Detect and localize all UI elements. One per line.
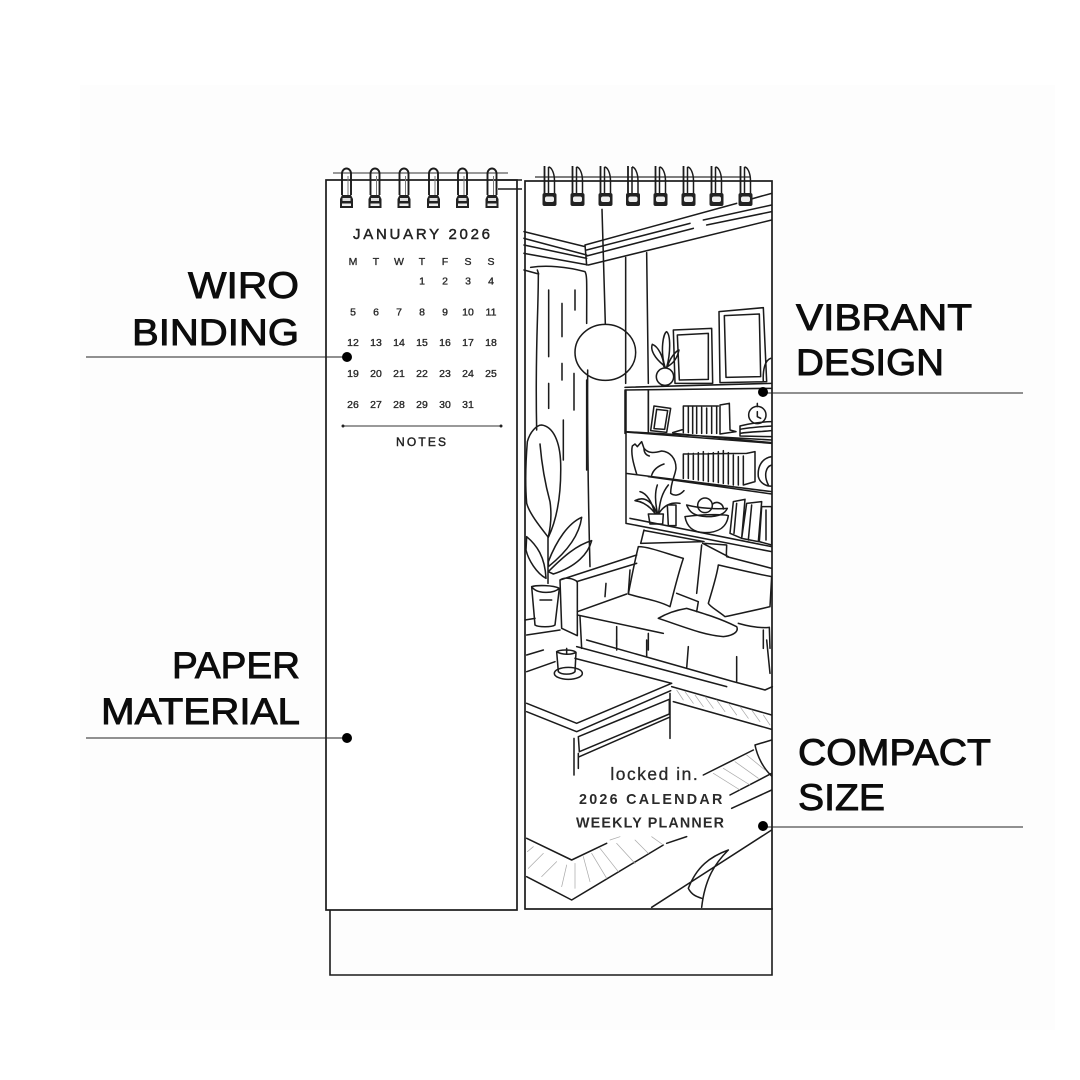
calendar date grid: 19 — [347, 368, 359, 380]
cover title text — [576, 764, 725, 832]
calendar date grid: 15 — [416, 337, 428, 349]
calendar date grid: 10 — [462, 306, 474, 318]
cover title text: locked in. — [610, 764, 698, 784]
calendar date grid: 20 — [370, 368, 382, 380]
callout: wiro binding: WIRO — [188, 265, 299, 306]
calendar date grid: 9 — [442, 306, 448, 318]
calendar date grid: 12 — [347, 337, 359, 349]
calendar date grid: M — [349, 256, 357, 268]
notes heading: NOTES — [396, 435, 446, 449]
calendar date grid: 28 — [393, 399, 405, 411]
calendar date grid: W — [394, 256, 404, 268]
calendar date grid: 7 — [396, 306, 402, 318]
calendar date grid: 27 — [370, 399, 382, 411]
calendar date grid: 25 — [485, 368, 497, 380]
calendar date grid: 1 — [419, 276, 425, 288]
calendar date grid: 11 — [486, 306, 497, 318]
callout: vibrant design: VIBRANT — [796, 297, 972, 338]
illustration: shelves, books, cat, plants, sofa — [525, 370, 772, 650]
calendar date grid — [347, 256, 497, 411]
calendar date grid: 24 — [462, 368, 474, 380]
panel: right cover page with line art — [524, 181, 772, 909]
callout: vibrant design: DESIGN — [796, 342, 944, 383]
calendar date grid: 23 — [439, 368, 451, 380]
calendar date grid: 30 — [439, 399, 451, 411]
callout: paper material: PAPER — [172, 645, 300, 686]
calendar date grid: 29 — [416, 399, 428, 411]
calendar date grid: T — [373, 256, 380, 268]
calendar date grid: 13 — [370, 337, 382, 349]
illustration: coffee table, cup, rug and armchair — [527, 640, 772, 907]
page month heading: JANUARY 2026 — [353, 226, 490, 243]
wiro binding: left page rings — [333, 168, 508, 208]
cover title text: 2026 CALENDAR — [579, 792, 723, 808]
callout: paper material — [86, 645, 352, 743]
calendar date grid: 8 — [419, 306, 425, 318]
calendar date grid: S — [487, 256, 495, 268]
calendar date grid: S — [464, 256, 472, 268]
calendar date grid: 17 — [462, 337, 474, 349]
calendar date grid: 31 — [462, 399, 474, 411]
calendar date grid: 5 — [350, 306, 356, 318]
panel: left calendar page — [326, 180, 517, 910]
calendar base stand — [330, 908, 772, 975]
callout: paper material: MATERIAL — [101, 691, 300, 732]
calendar date grid: 14 — [393, 337, 405, 349]
calendar date grid: 22 — [416, 368, 428, 380]
calendar date grid: 3 — [465, 276, 471, 288]
callout: wiro binding — [86, 265, 352, 362]
cover title text: WEEKLY PLANNER — [576, 816, 725, 832]
calendar date grid: 16 — [439, 337, 451, 349]
callout: vibrant design — [758, 297, 1023, 397]
calendar date grid: 6 — [373, 306, 379, 318]
callout: compact size: COMPACT — [798, 732, 991, 773]
callout: compact size: SIZE — [798, 777, 885, 818]
calendar date grid: 2 — [442, 276, 448, 288]
calendar date grid: T — [419, 256, 426, 268]
callout: compact size — [758, 732, 1023, 831]
callout: wiro binding: BINDING — [132, 312, 299, 353]
calendar date grid: 4 — [488, 276, 494, 288]
notes divider — [342, 424, 502, 428]
calendar date grid: 26 — [347, 399, 359, 411]
calendar date grid: 21 — [393, 368, 405, 380]
illustration: ceiling, curtain, pendant lamp and shelf decor — [524, 193, 772, 470]
calendar date grid: F — [442, 256, 448, 268]
wire connector between pages — [498, 180, 522, 189]
wiro binding: right page rings — [535, 166, 752, 206]
calendar date grid: 18 — [485, 337, 497, 349]
